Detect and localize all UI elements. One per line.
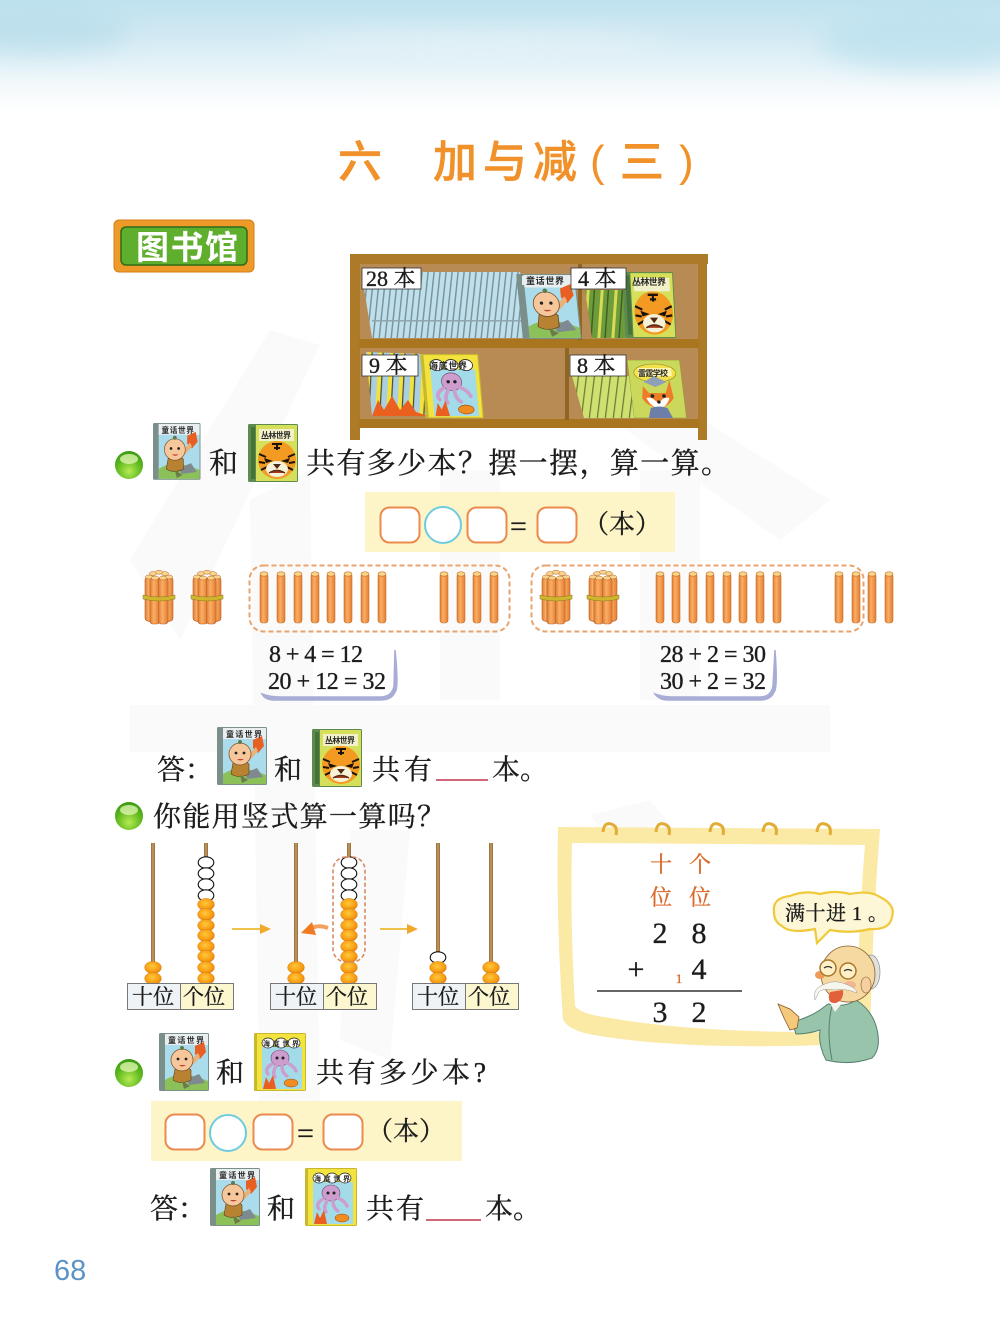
icon: ocean book: 海底世界 [263, 1039, 299, 1048]
badge: library: 图书馆 [136, 229, 238, 266]
answer line 1: 本。 [492, 754, 548, 786]
icon: ocean book [305, 1168, 357, 1226]
abacus 2 [270, 843, 376, 1010]
pale watermark strokes [130, 330, 830, 1130]
teacher character [778, 946, 880, 1063]
arrow [232, 924, 271, 934]
shelf books: 9 ocean books [366, 352, 484, 418]
label: 9 books: 9 本 [369, 353, 408, 378]
shelf books: 28 storybooks: 童话世界 [526, 275, 564, 286]
answer line 2: 共有 [366, 1193, 424, 1225]
notepad rings [603, 824, 830, 835]
abacus 1: 十位 [132, 985, 174, 1009]
answer line 1: 答： [157, 754, 213, 786]
column addition: 8 [692, 917, 706, 950]
answer line 1: 共有 [372, 754, 432, 786]
hand [778, 1004, 799, 1030]
shelf books: 28 storybooks [364, 272, 582, 339]
label: 9 books [362, 353, 418, 378]
answer line 2: 答： [150, 1193, 206, 1225]
answer line 2: 本。 [485, 1193, 541, 1225]
column addition: 位 [650, 885, 672, 910]
column addition: + [628, 953, 644, 986]
equation band 1 [365, 492, 675, 552]
title: ) [679, 137, 694, 186]
icon: storybook: 童话世界 [219, 1170, 255, 1180]
icon: forest book: 丛林世界 [261, 430, 291, 440]
title: 三 [620, 138, 664, 187]
page number: 68 [54, 1255, 86, 1287]
equation band 1: （本） [583, 510, 661, 539]
abacus 3: 十位 [417, 985, 459, 1009]
question 3 line [115, 1033, 486, 1091]
column addition: 2 [692, 996, 706, 1029]
icon: ocean book: 海底世界 [314, 1174, 350, 1183]
question 3 line: 和 [216, 1057, 244, 1089]
calculation box: right: 30 + 2 = 32 [660, 669, 766, 695]
abacus 1 [128, 843, 234, 1010]
icon: storybook [210, 1168, 260, 1226]
icon: forest book [312, 729, 362, 787]
calculation box: left [262, 642, 397, 700]
icon: ocean book [254, 1033, 306, 1091]
title: ( [590, 137, 605, 186]
badge: library [114, 220, 254, 272]
equation band 1: = [510, 510, 527, 543]
column addition: 3 [652, 996, 668, 1029]
calculation box: left: 8 + 4 = 12 [269, 642, 363, 668]
rods: left method [143, 566, 510, 632]
label: 4 books: 4 本 [578, 266, 617, 291]
shelf books: 4 forest books: 丛林世界 [632, 276, 666, 287]
equation band 2: = [297, 1117, 314, 1150]
abacus 2: 十位 [275, 985, 317, 1009]
icon: storybook [153, 423, 200, 480]
question 1 line: 共有多少本？摆一摆，算一算。 [306, 447, 730, 480]
decorative sky banner [0, 0, 1000, 112]
answer line 2: 和 [267, 1193, 295, 1225]
icon: storybook [217, 727, 267, 785]
icon: forest book [248, 424, 298, 482]
icon: storybook: 童话世界 [162, 425, 194, 435]
label: 28 books: 28 本 [366, 266, 416, 291]
equation band 2: （本） [367, 1117, 445, 1146]
notepad panel [558, 824, 880, 1046]
question 1 line [115, 423, 730, 482]
icon: storybook [159, 1033, 209, 1091]
label: 8 books: 8 本 [577, 353, 616, 378]
arrow [380, 924, 418, 934]
abacus 1: 个位 [183, 985, 225, 1009]
calculation box: right: 28 + 2 = 30 [660, 642, 766, 668]
equation band 2 [151, 1101, 462, 1161]
column addition: 十 [650, 852, 672, 877]
speech bubble [774, 892, 893, 943]
icon: storybook: 童话世界 [168, 1035, 204, 1045]
shelf books: 4 forest books [585, 272, 676, 338]
rods: right method [532, 566, 893, 632]
robe [792, 1000, 878, 1063]
column addition [597, 852, 742, 1029]
label: 8 books [570, 353, 626, 378]
abacus 3: 个位 [468, 985, 510, 1009]
shelf books: 9 ocean books: 海底世界 [429, 360, 467, 371]
answer line 1: 和 [274, 754, 302, 786]
bookshelf illustration [350, 254, 708, 440]
hair [862, 955, 880, 989]
question 1 line: 和 [209, 447, 238, 480]
icon: storybook: 童话世界 [226, 729, 262, 739]
question 3 line: 共有多少本? [316, 1057, 486, 1089]
calculation box: right [655, 642, 776, 700]
column addition: 个 [689, 852, 711, 877]
column addition: 2 [652, 917, 668, 950]
column addition: 1 [676, 971, 682, 986]
speech bubble: 满十进 1 。 [785, 902, 888, 925]
question 2 line: 你能用竖式算一算吗？ [153, 801, 445, 833]
answer line 2 [150, 1168, 541, 1226]
shelf books: 8 fox books [572, 360, 687, 418]
head [821, 946, 875, 1002]
title: 加与减 [433, 138, 577, 187]
title: 六 [338, 138, 382, 187]
abacus 2: 个位 [326, 985, 368, 1009]
abacus 3 [412, 843, 518, 1010]
icon: forest book: 丛林世界 [325, 735, 355, 745]
column addition: 4 [692, 953, 706, 986]
title [338, 137, 694, 187]
shelf books: 8 fox books: 雷霆学校 [638, 368, 668, 378]
answer line 1 [157, 727, 548, 787]
calculation box: left: 20 + 12 = 32 [268, 669, 386, 695]
column addition: 位 [689, 885, 711, 910]
arrow: carry [301, 922, 328, 935]
